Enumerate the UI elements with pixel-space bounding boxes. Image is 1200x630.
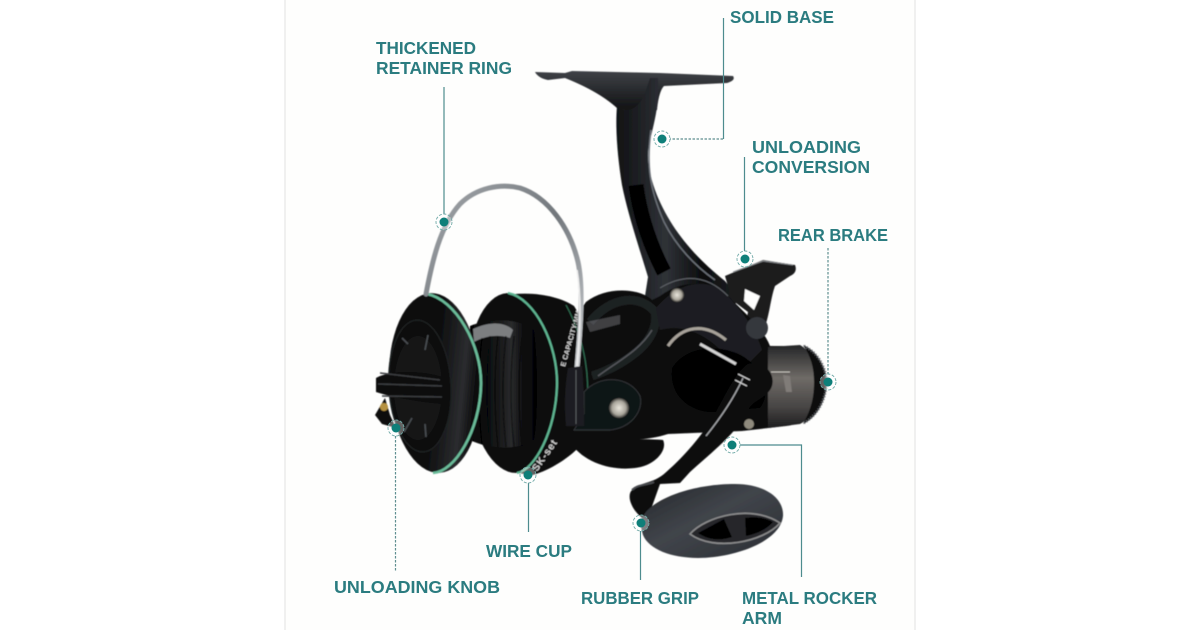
body bright inner ring bbox=[668, 329, 726, 346]
callout: thickened retainer ring bbox=[376, 38, 512, 230]
dashed leader bbox=[394, 436, 396, 571]
bail pivot screw bbox=[609, 398, 629, 418]
bail arm housing bbox=[574, 380, 641, 430]
main gear body bbox=[566, 284, 820, 450]
fishing reel illustration bbox=[375, 71, 827, 558]
reel stem bbox=[616, 78, 740, 330]
callout: unloading knob bbox=[334, 420, 500, 597]
handle screw bbox=[744, 419, 754, 429]
unloading knob bbox=[376, 372, 443, 404]
label: ARM bbox=[742, 608, 782, 628]
lever gap bbox=[744, 289, 760, 310]
label: RETAINER RING bbox=[376, 58, 512, 78]
label: WIRE CUP bbox=[486, 541, 572, 561]
rear brake band bbox=[768, 345, 821, 428]
centre panel bbox=[285, 0, 915, 630]
callout: rear brake bbox=[778, 225, 888, 390]
stem highlight bbox=[649, 130, 715, 280]
face spokes bbox=[402, 335, 428, 437]
rear brake ridged knob bbox=[803, 345, 827, 424]
front spool flange bbox=[384, 291, 486, 475]
leader line bbox=[740, 445, 802, 577]
skirt text: brand: SK-set bbox=[530, 438, 560, 474]
rear spool skirt bbox=[515, 294, 592, 475]
central black cylinder bbox=[672, 348, 766, 412]
grip window bbox=[690, 513, 780, 543]
bail wire bbox=[426, 186, 581, 368]
bail pivot sleeve bbox=[565, 366, 584, 426]
label: UNLOADING KNOB bbox=[334, 577, 500, 597]
marker bbox=[737, 251, 753, 267]
callout: rubber grip bbox=[581, 515, 699, 608]
callout: unloading conversion bbox=[737, 137, 870, 267]
marker bbox=[388, 420, 404, 436]
front flange green rim bbox=[427, 294, 481, 473]
label: UNLOADING bbox=[752, 137, 861, 157]
label: METAL ROCKER bbox=[742, 588, 877, 608]
rear spool flange bbox=[463, 291, 561, 475]
label: SOLID BASE bbox=[730, 7, 834, 27]
rubber grip bbox=[641, 484, 783, 558]
lower rotor cup bbox=[572, 439, 664, 469]
lever pivot knob bbox=[746, 317, 768, 339]
spool face bbox=[386, 318, 454, 454]
metal rocker arm bbox=[630, 363, 773, 518]
rear flange green rim bbox=[508, 293, 557, 473]
leader line bbox=[640, 531, 642, 580]
label: CONVERSION bbox=[752, 157, 870, 177]
body upper plate bbox=[656, 284, 762, 372]
unloading conversion lever bbox=[725, 260, 796, 332]
reel foot: solid base bbox=[535, 71, 734, 114]
marker bbox=[654, 131, 670, 147]
leader line bbox=[722, 18, 724, 139]
callout: wire cup bbox=[486, 467, 572, 561]
label: THICKENED bbox=[376, 38, 476, 58]
dashed leader bbox=[670, 138, 723, 140]
dashed leader bbox=[827, 248, 829, 374]
callout: solid base bbox=[654, 7, 834, 147]
spool line section bbox=[470, 320, 537, 448]
label: REAR BRAKE bbox=[778, 225, 888, 245]
callout: metal rocker arm bbox=[724, 437, 877, 628]
marker bbox=[520, 467, 536, 483]
marker bbox=[633, 515, 649, 531]
leader line bbox=[528, 483, 530, 532]
marker bbox=[436, 214, 452, 230]
leader line bbox=[443, 87, 445, 214]
label: RUBBER GRIP bbox=[581, 588, 699, 608]
rotor cup highlights bbox=[590, 300, 656, 376]
marker bbox=[724, 437, 740, 453]
marker bbox=[820, 374, 836, 390]
frame screw bbox=[670, 288, 684, 302]
leader line bbox=[744, 157, 746, 251]
skirt text: capacity: E CAPACITY:MM bbox=[560, 310, 583, 368]
